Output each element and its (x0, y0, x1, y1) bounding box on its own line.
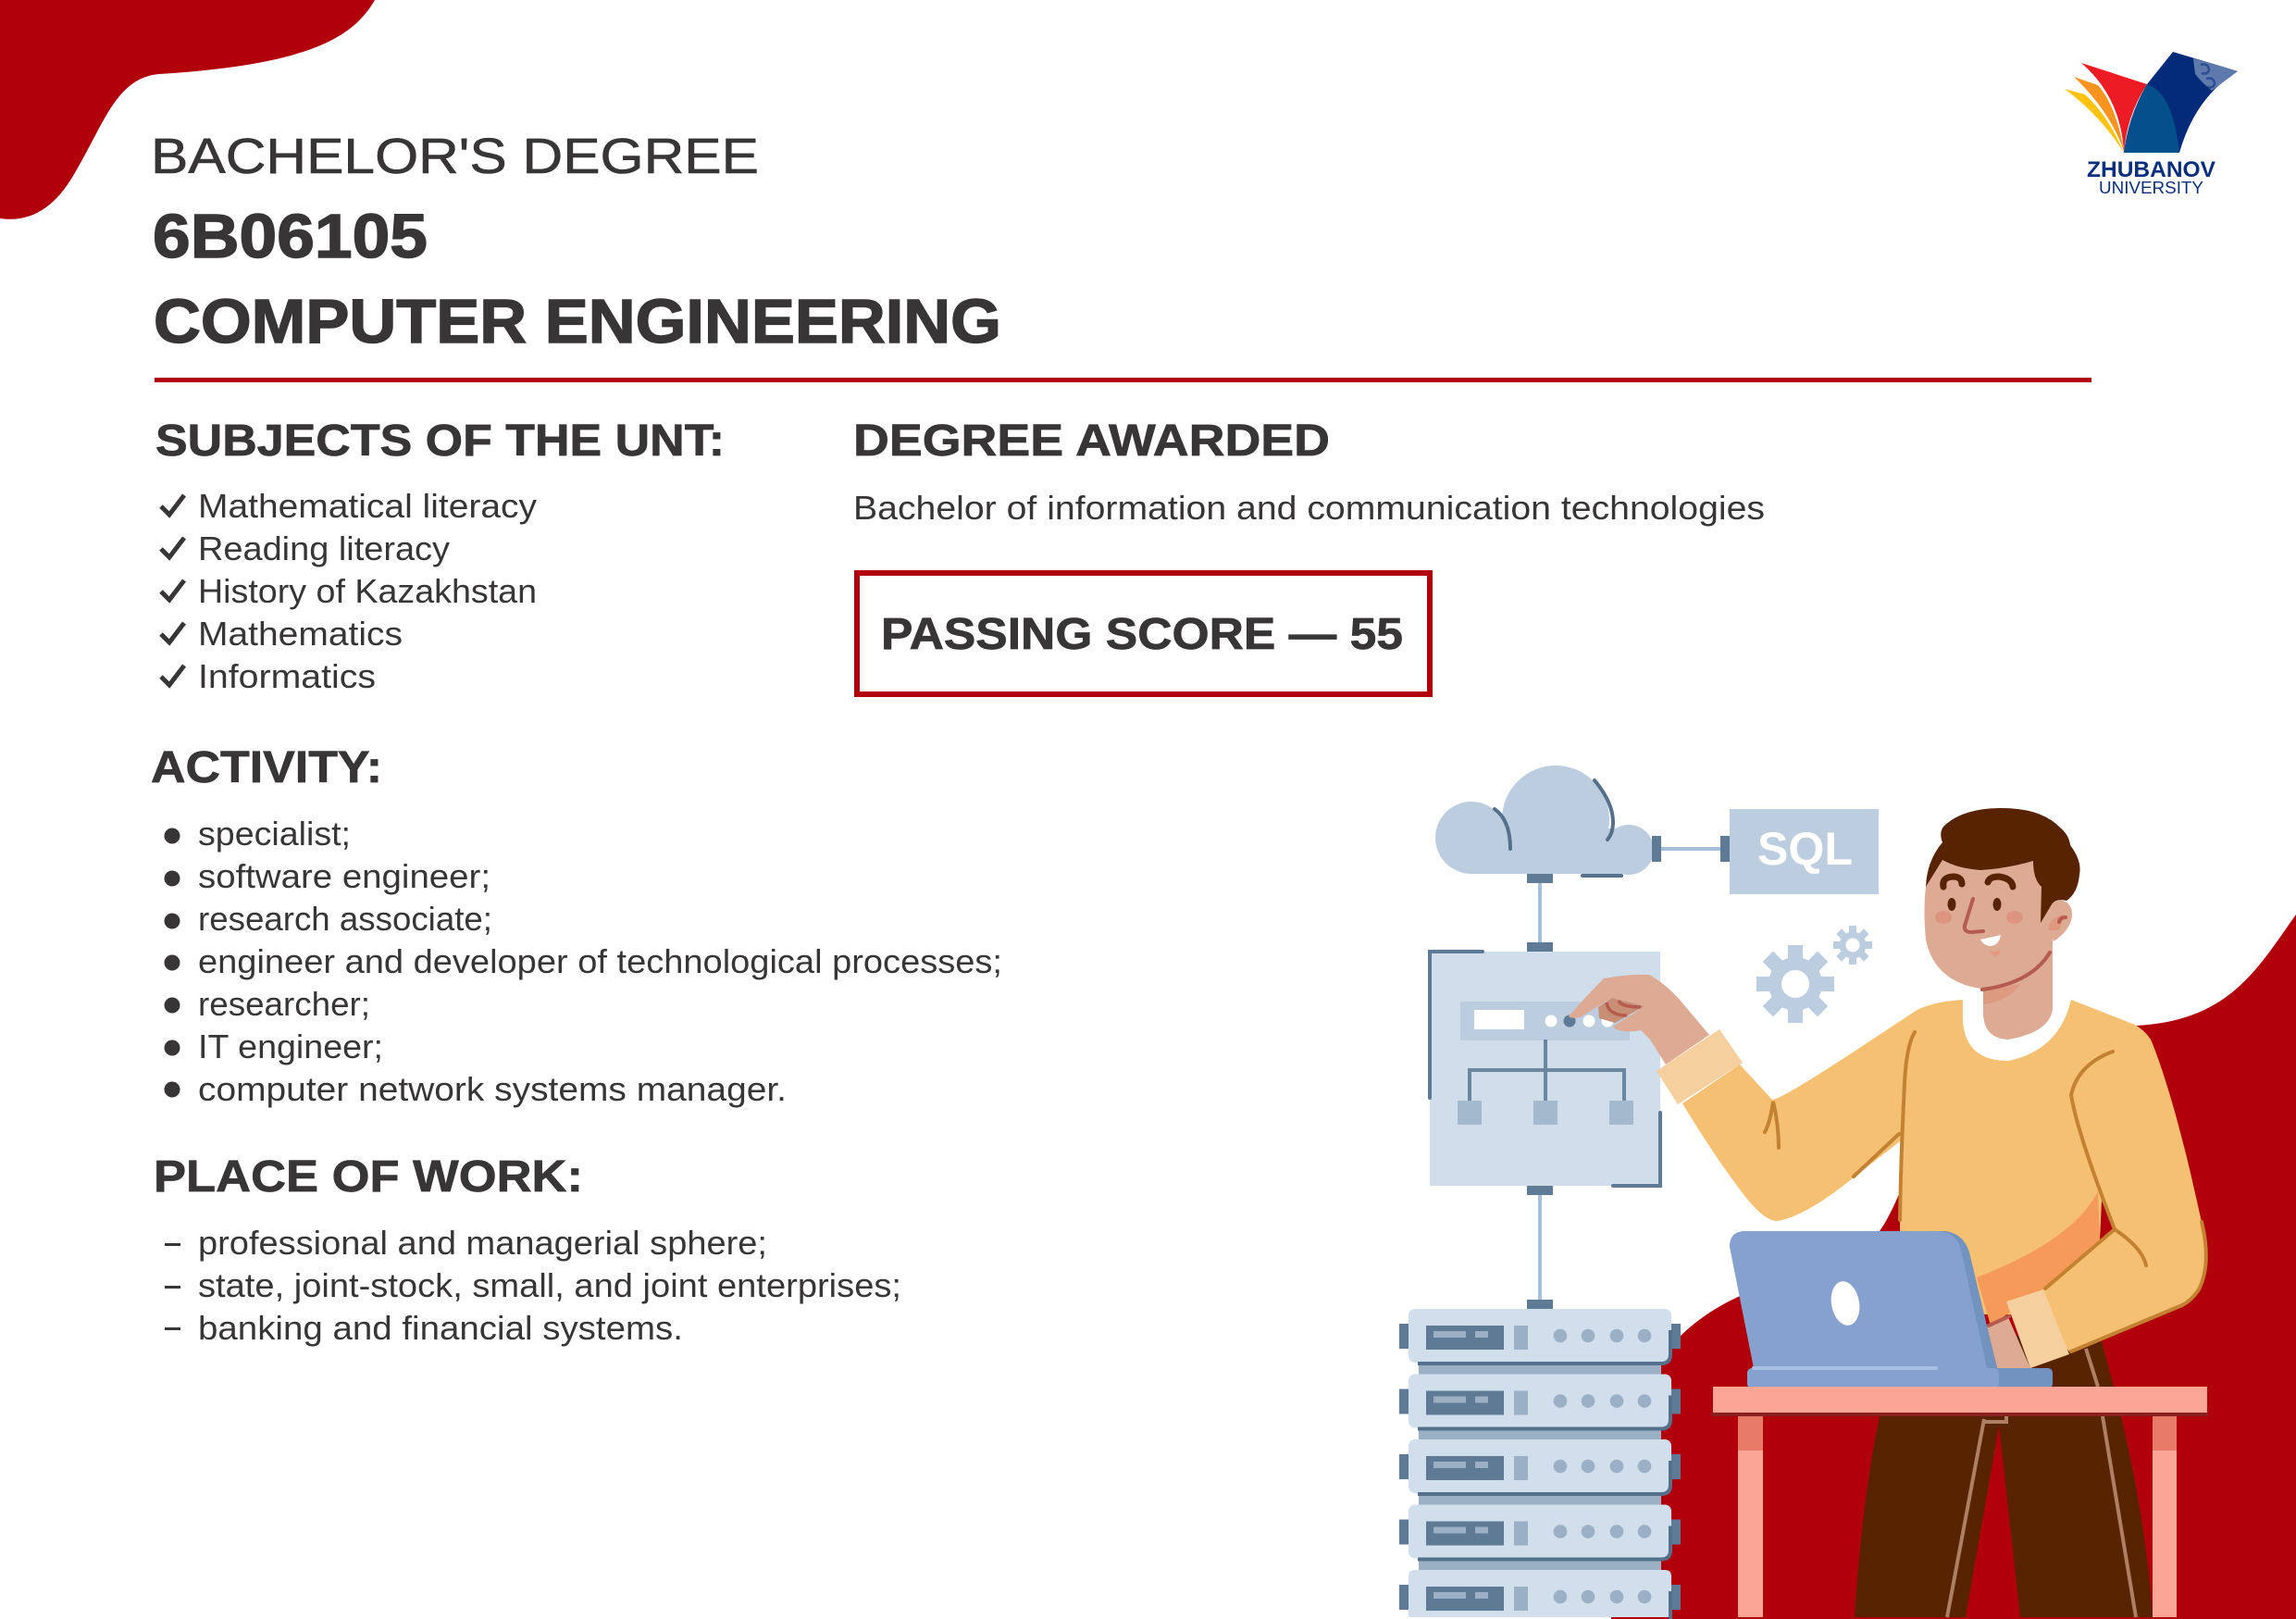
title block (151, 129, 1001, 356)
server unit 2 (1399, 1374, 1681, 1440)
panel: degree awarded (853, 417, 1765, 527)
activity list: computer network systems manager. (198, 1070, 787, 1108)
network panel (1430, 952, 1660, 1186)
server unit 1 (1399, 1309, 1681, 1375)
place of work list (198, 1224, 901, 1347)
heading: PLACE OF WORK: (154, 1152, 583, 1202)
programme code: 6B06105 (153, 202, 428, 271)
head and neck (1925, 808, 2080, 1040)
icon: small gear (1833, 926, 1872, 965)
place of work list: professional and managerial sphere; (198, 1224, 767, 1262)
panel: place of work (154, 1152, 901, 1347)
subject list: Reading literacy (198, 529, 450, 567)
panel: subjects of the UNT (155, 417, 725, 695)
red background blob (1611, 915, 2296, 1619)
activity list: researcher; (198, 985, 370, 1023)
icon: large gear (1756, 945, 1834, 1023)
illustration: engineer with servers (1399, 766, 2296, 1619)
trousers (1855, 1333, 2153, 1617)
place of work list: state, joint-stock, small, and joint enterprises; (198, 1266, 901, 1304)
right cuff (2006, 1289, 2069, 1368)
logo text (2087, 157, 2215, 197)
panel: activity (151, 743, 1002, 1108)
logo text: ZHUBANOV (2087, 157, 2215, 182)
SQL box: SQL (1757, 823, 1853, 875)
collar (1963, 992, 2071, 1061)
callout: passing score (857, 573, 1430, 694)
sweater crease lines (1765, 1032, 2206, 1351)
logo mark (2065, 52, 2238, 153)
activity list: software engineer; (198, 857, 490, 895)
pointing hand (1569, 975, 1709, 1065)
subject list: Mathematical literacy (198, 487, 537, 525)
place of work list: banking and financial systems. (198, 1309, 683, 1347)
server rack (1399, 1309, 1681, 1619)
hair (1926, 808, 2080, 923)
icon: cloud (1435, 766, 1654, 876)
subject list: Informatics (198, 657, 376, 695)
right wrist (1987, 1316, 2030, 1368)
degree text: Bachelor of information and communication technologies (853, 489, 1765, 527)
logo text: UNIVERSITY (2099, 178, 2203, 197)
activity list: engineer and developer of technological processes; (198, 942, 1002, 980)
dashes (165, 1243, 180, 1330)
server unit 4 (1399, 1505, 1681, 1570)
degree level: BACHELOR'S DEGREE (151, 129, 759, 184)
activity list: specialist; (198, 815, 351, 853)
callout: passing score: PASSING SCORE — 55 (881, 610, 1403, 659)
sweater (1682, 1000, 2206, 1351)
subject list: History of Kazakhstan (198, 572, 537, 610)
activity list (198, 815, 1002, 1108)
server unit 3 (1399, 1439, 1681, 1505)
connectors (1527, 836, 1730, 1309)
activity list: research associate; (198, 900, 492, 938)
check icons (161, 495, 184, 685)
heading: ACTIVITY: (151, 743, 382, 792)
laptop (1730, 1231, 2053, 1389)
table (1711, 1387, 2208, 1617)
subject list: Mathematics (198, 615, 403, 653)
decorative red corner blob (0, 0, 375, 219)
bullets (165, 828, 180, 1098)
face details (1935, 877, 2066, 990)
heading: SUBJECTS OF THE UNT: (155, 417, 725, 466)
SQL box (1730, 809, 1879, 894)
heading: DEGREE AWARDED (853, 417, 1330, 466)
left cuff (1657, 1029, 1743, 1104)
activity list: IT engineer; (198, 1027, 383, 1065)
subject list (198, 487, 537, 695)
programme name: COMPUTER ENGINEERING (154, 287, 1001, 356)
server unit 5 (1399, 1570, 1681, 1619)
logo: Zhubanov University (2065, 52, 2238, 197)
